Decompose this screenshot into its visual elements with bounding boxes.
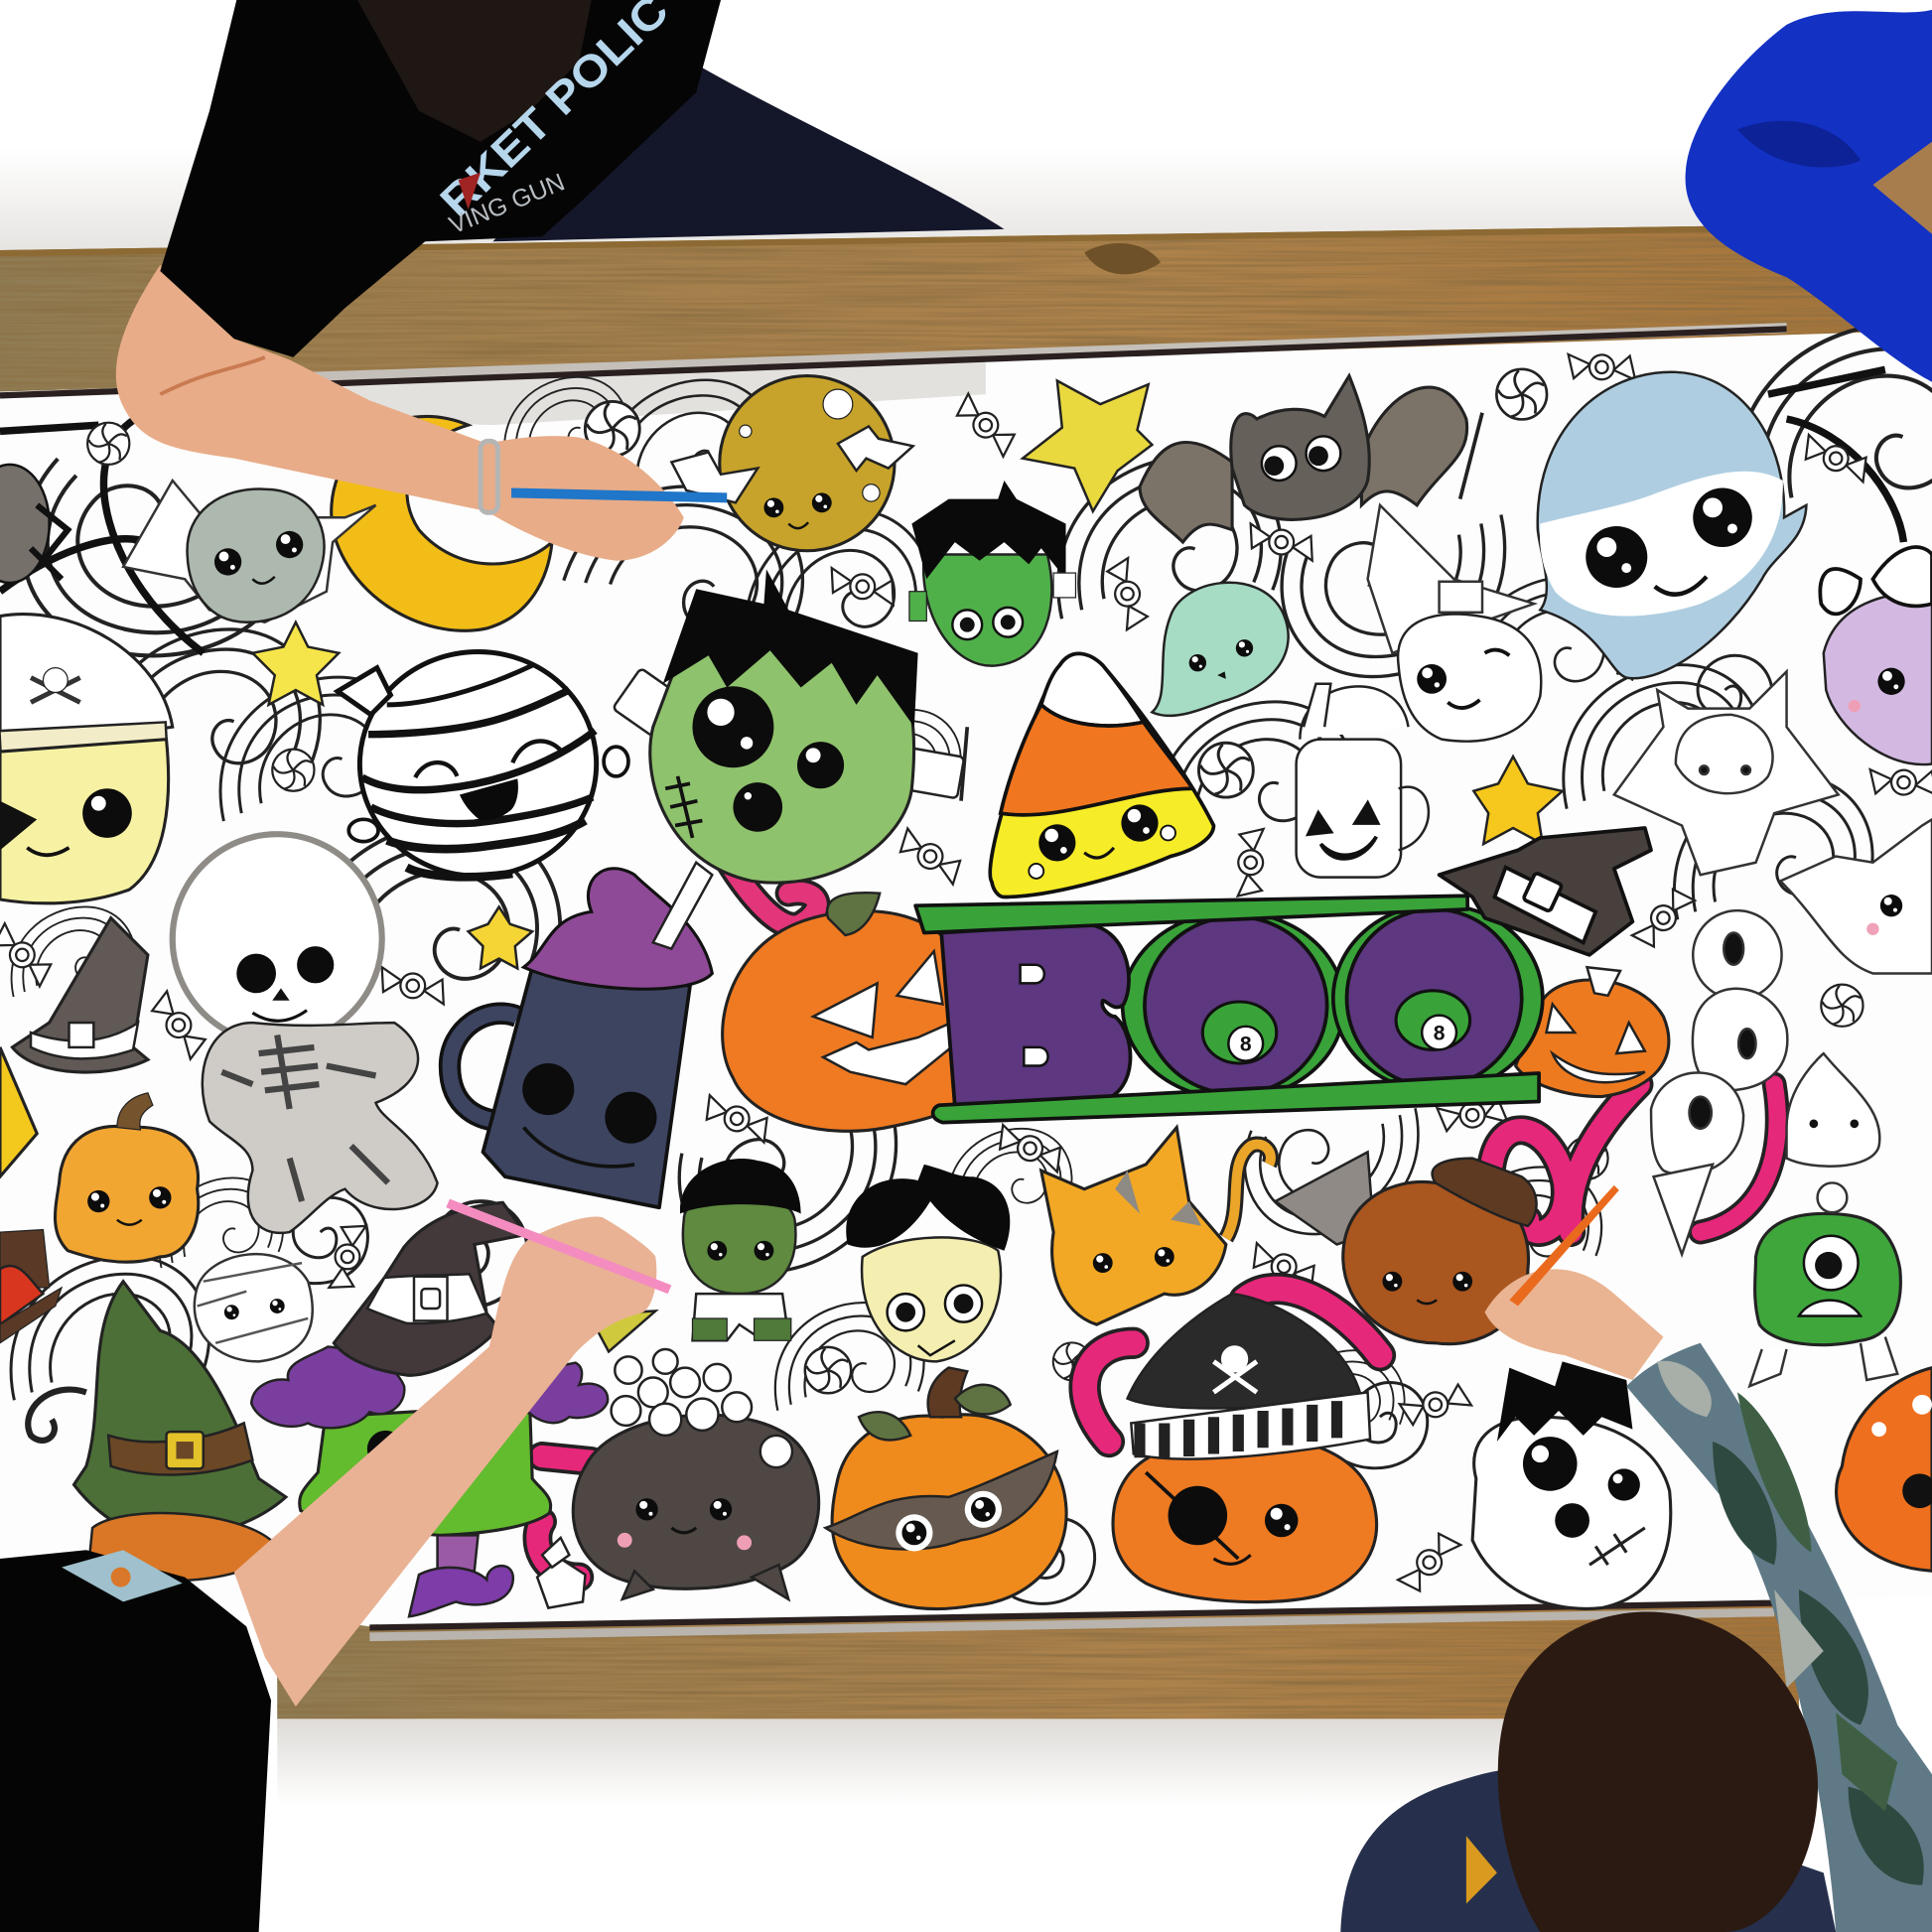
BOO title: 8 [1434, 1022, 1446, 1044]
BOO title: O [1162, 885, 1310, 1132]
candy corn left edge [0, 1047, 37, 1176]
table wood top rail [0, 223, 1932, 392]
person top left: shirt and hair [160, 0, 721, 357]
person top right: blue sweater [1686, 10, 1932, 382]
pink swirls [537, 838, 1777, 1578]
bat [1140, 376, 1467, 542]
yellow-orange pumpkin [56, 1093, 199, 1262]
BOO title: O [1360, 878, 1508, 1125]
grey skull ghost with bat wings [123, 481, 376, 622]
little mummy bottom left [195, 1254, 313, 1361]
white witch [1368, 505, 1541, 742]
person top left: trousers [492, 68, 1004, 241]
dracula [846, 1165, 1010, 1361]
person top left: arm and hand [116, 265, 727, 561]
wrapped candy diamond [537, 1538, 586, 1608]
small candies and lollipops [0, 344, 1932, 1598]
witch hat on BOO [1440, 828, 1651, 955]
frankenstein big [613, 569, 964, 883]
green witch hat [28, 1282, 286, 1581]
small grey witch hat [12, 918, 148, 1072]
shadow below table [277, 1719, 1805, 1805]
person bottom left: arm and hand [234, 1199, 671, 1707]
table wood bottom rail [277, 1589, 1799, 1719]
person top left: shirt and hair: VING GUN [446, 169, 569, 239]
frankenstein small green top [909, 481, 1075, 666]
shadow above table [0, 148, 1932, 252]
pumpkin big left of BOO [723, 893, 967, 1131]
mummy [338, 652, 628, 877]
green monster [1749, 1182, 1900, 1386]
white cat right edge [1780, 819, 1932, 973]
mug [450, 863, 712, 1207]
pirate bandana character left [0, 615, 173, 903]
purple bow ghost [1820, 547, 1932, 764]
big blue ghost [1538, 372, 1806, 678]
pumpkin small right of BOO [1516, 967, 1669, 1097]
BOO title [915, 878, 1543, 1141]
white cat with bat wings [1614, 671, 1839, 875]
eyeball tower [1651, 910, 1787, 1174]
person bottom right: jacket and hair [1340, 1611, 1836, 1932]
white frankenstein bottom right [1472, 1361, 1671, 1608]
frankenstein small lower [680, 1159, 801, 1340]
ghost ice cream [1654, 1053, 1879, 1254]
star top centre [1023, 380, 1152, 511]
candy corn [990, 653, 1213, 897]
person top left: shirt and hair: RKET POLIC [432, 0, 678, 226]
jar with jack-o-lantern face [1297, 684, 1429, 878]
star behind lower hand [589, 1311, 655, 1351]
tiger cat [1041, 1128, 1271, 1324]
grey bat wing and brown pumpkin [1276, 1152, 1537, 1344]
gold moon face [671, 376, 913, 551]
pirate pumpkin [1113, 1294, 1377, 1602]
person bottom right: hand and pencil [1484, 1185, 1663, 1380]
skeleton [173, 834, 438, 1233]
spider left edge [0, 465, 68, 583]
campfire left edge [0, 1230, 62, 1343]
star left [252, 622, 339, 705]
paper sheet [0, 323, 1932, 1641]
masked pumpkin [826, 1368, 1066, 1608]
star small mid left [469, 906, 532, 968]
background swirls [0, 325, 1932, 1603]
BOO title: 8 [1240, 1034, 1252, 1056]
moon yellow crescent [332, 416, 552, 630]
witch with purple hair [251, 1202, 608, 1616]
star right [1473, 757, 1563, 844]
cauldron [573, 1349, 819, 1599]
mint ghost [1152, 583, 1289, 716]
orange pumpkin right edge [1837, 1368, 1932, 1571]
person bottom left: black shirt [0, 1550, 271, 1932]
person bottom right: camo sleeve [1626, 1343, 1932, 1932]
BOO title: B [961, 886, 1111, 1141]
